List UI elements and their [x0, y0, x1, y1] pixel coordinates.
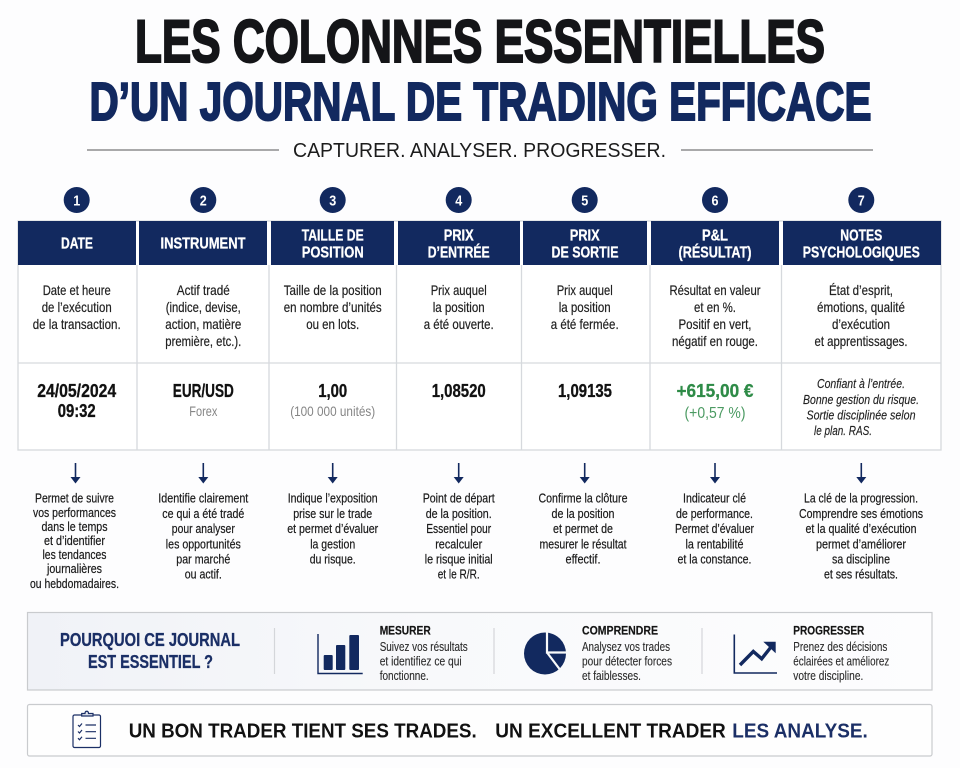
- subtitle: CAPTURER. ANALYSER. PROGRESSER.: [293, 140, 666, 162]
- header: P&L: P&L: [702, 228, 728, 244]
- benefit: prix d'entrée: Point de départ: [423, 490, 495, 506]
- description: notes psychologiques: [814, 282, 908, 349]
- benefit: notes psychologiques: Comprendre ses émotions: [799, 506, 923, 521]
- example: date: 09:32: [58, 401, 96, 421]
- benefit: prix de sortie: mesurer le résultat: [540, 536, 627, 552]
- description: prix d'entrée: la position: [433, 299, 485, 315]
- description: notes psychologiques: et apprentissages.: [814, 333, 908, 349]
- benefit: prix de sortie: et permet de: [553, 521, 613, 536]
- description: instrument: Actif tradé: [177, 282, 230, 298]
- arrow 6: [710, 463, 720, 484]
- badge 1: [64, 187, 90, 213]
- arrow 4: [454, 463, 464, 484]
- example: notes psychologiques: Bonne gestion du risque.: [803, 392, 919, 407]
- badge 5: [572, 187, 598, 213]
- description: P&L: Résultat en valeur: [670, 282, 761, 298]
- column 2: instrument: [139, 187, 267, 582]
- benefit: taille de position: la gestion: [310, 536, 355, 552]
- description: notes psychologiques: émotions, qualité: [817, 299, 905, 315]
- header: date: [18, 221, 136, 265]
- example: prix de sortie: 1,09135: [558, 381, 612, 401]
- benefit: notes psychologiques: et la qualité d’exécution: [806, 521, 916, 536]
- example: taille de position: [290, 381, 375, 419]
- header: notes psychologiques: PSYCHOLOGIQUES: [803, 244, 920, 262]
- benefit: prix d'entrée: [423, 490, 495, 582]
- description: prix d'entrée: Prix auquel: [431, 282, 487, 298]
- description: P&L: [670, 282, 761, 349]
- mesurer text: MESURER: [380, 624, 431, 638]
- comprendre text: [582, 624, 672, 683]
- description: prix de sortie: a été fermée.: [551, 316, 619, 332]
- description: taille de position: [284, 282, 382, 332]
- title: [90, 8, 872, 132]
- badge 3: 3: [329, 192, 336, 210]
- benefit: P&L: Permet d’évaluer: [675, 521, 755, 536]
- column 4: prix d'entrée: [398, 187, 520, 582]
- benefit: prix de sortie: [538, 490, 628, 566]
- header: prix de sortie: DE SORTIE: [552, 244, 619, 262]
- benefit: prix d'entrée: de la position.: [426, 506, 492, 521]
- benefit: date: Permet de suivre: [35, 490, 114, 506]
- benefit: date: journalières: [46, 561, 102, 576]
- benefit: prix de sortie: Confirme la clôture: [538, 490, 628, 506]
- mesurer text: fonctionne.: [380, 669, 429, 683]
- progresser text: votre discipline.: [793, 669, 863, 683]
- description: instrument: (indice, devise,: [166, 299, 241, 315]
- benefit: date: ou hebdomadaires.: [30, 576, 119, 591]
- benefit: instrument: ou actif.: [185, 566, 222, 582]
- badge 2: [190, 187, 216, 213]
- mesurer text: Suivez vos résultats: [380, 640, 468, 654]
- benefit: date: et d’identifier: [44, 533, 106, 548]
- benefit: notes psychologiques: La clé de la progression.: [804, 490, 918, 506]
- description: P&L: négatif en rouge.: [672, 333, 758, 349]
- description: P&L: et en %.: [694, 299, 736, 315]
- progresser text: [793, 624, 889, 683]
- description: date: de la transaction.: [33, 316, 121, 332]
- badge 2: 2: [200, 192, 207, 210]
- benefit: taille de position: prise sur le trade: [293, 506, 372, 521]
- benefit: instrument: Identifie clairement: [158, 490, 249, 506]
- benefit: date: vos performances: [33, 505, 116, 520]
- panel heading: EST ESSENTIEL ?: [88, 652, 213, 672]
- comprendre text: et faiblesses.: [582, 669, 641, 683]
- example: instrument: Forex: [189, 403, 217, 419]
- example: P&L: (+0,57 %): [684, 405, 746, 422]
- benefit: prix d'entrée: recalculer: [435, 536, 483, 552]
- description: P&L: Positif en vert,: [678, 316, 752, 332]
- example: date: 24/05/2024: [37, 381, 116, 401]
- header: taille de position: POSITION: [302, 244, 364, 262]
- header: prix d'entrée: [398, 221, 520, 265]
- description: prix d'entrée: [424, 282, 494, 332]
- header: P&L: [651, 221, 779, 265]
- description: instrument: [165, 282, 241, 349]
- example: prix d'entrée: 1,08520: [432, 381, 486, 401]
- benefit: taille de position: et permet d’évaluer: [287, 521, 379, 536]
- icon: trend arrow: [734, 634, 777, 673]
- header: P&L: (RÉSULTAT): [678, 242, 752, 262]
- benefit: notes psychologiques: et ses résultats.: [824, 566, 898, 582]
- badge 3: [320, 187, 346, 213]
- header: prix d'entrée: D’ENTRÉE: [428, 242, 490, 262]
- example: notes psychologiques: Sortie disciplinée selon: [806, 408, 916, 422]
- benefit: taille de position: du risque.: [310, 552, 356, 566]
- example: instrument: [173, 381, 234, 419]
- benefit: date: les tendances: [42, 547, 107, 562]
- benefit: P&L: la rentabilité: [686, 536, 744, 552]
- header: prix de sortie: PRIX: [570, 228, 600, 244]
- benefit: P&L: Indicateur clé: [683, 490, 746, 506]
- description: taille de position: Taille de la position: [284, 282, 382, 298]
- benefit: instrument: par marché: [176, 552, 230, 566]
- badge 7: [848, 187, 874, 213]
- benefit: notes psychologiques: sa discipline: [832, 552, 890, 566]
- panel heading: POURQUOI CE JOURNAL: [60, 630, 240, 650]
- example: instrument: EUR/USD: [173, 381, 234, 401]
- example: date: [37, 381, 116, 421]
- badge 5: 5: [581, 192, 588, 210]
- description: taille de position: ou en lots.: [306, 316, 359, 332]
- progresser text: éclairées et améliorez: [793, 654, 889, 668]
- badge 1: 1: [73, 192, 80, 210]
- panel heading: [60, 630, 240, 672]
- badge 6: [702, 187, 728, 213]
- description: prix d'entrée: a été ouverte.: [424, 316, 494, 332]
- column 5: prix de sortie: [523, 187, 647, 566]
- badge 4: [446, 187, 472, 213]
- benefit: P&L: de performance.: [676, 506, 753, 521]
- panel: conclusion: [28, 704, 932, 756]
- column 3: taille de position: [271, 187, 394, 566]
- badge 7: 7: [858, 192, 865, 210]
- icon: bar chart: [318, 634, 363, 674]
- description: prix de sortie: la position: [559, 299, 611, 315]
- header: notes psychologiques: [783, 221, 941, 265]
- column 6: P&L: [651, 187, 779, 566]
- comprendre text: pour détecter forces: [582, 654, 672, 668]
- header: prix d'entrée: PRIX: [444, 228, 474, 244]
- panel: conclusion: LES ANALYSE.: [732, 720, 868, 742]
- benefit: instrument: pour analyser: [172, 521, 235, 536]
- benefit: P&L: [675, 490, 755, 566]
- badge 6: 6: [712, 192, 718, 210]
- header: prix de sortie: [523, 221, 647, 265]
- example: P&L: [676, 380, 754, 422]
- benefit: taille de position: [287, 490, 379, 566]
- example: notes psychologiques: [803, 376, 919, 438]
- conclusion text: UN BON TRADER TIENT SES TRADES.: [129, 720, 477, 742]
- arrow 3: [328, 463, 338, 484]
- example: notes psychologiques: le plan. RAS.: [814, 423, 872, 438]
- example: taille de position: (100 000 unités): [290, 403, 375, 419]
- header: notes psychologiques: NOTES: [840, 228, 883, 244]
- benefit: date: [30, 490, 119, 591]
- example: P&L: +615,00 €: [676, 380, 754, 401]
- benefit: prix de sortie: de la position: [552, 506, 614, 521]
- comprendre text: COMPRENDRE: [582, 624, 658, 638]
- benefit: instrument: ce qui a été tradé: [162, 506, 244, 521]
- benefit: notes psychologiques: permet d’améliorer: [816, 536, 907, 552]
- description: notes psychologiques: d’exécution: [832, 316, 890, 332]
- arrow 1: [70, 463, 80, 484]
- benefit: prix d'entrée: et le R/R.: [438, 566, 480, 582]
- column 1: date: [18, 187, 136, 591]
- icon: pie chart: [524, 631, 567, 674]
- table grid: [18, 221, 941, 450]
- arrow 2: [198, 463, 208, 484]
- benefit: notes psychologiques: [799, 490, 923, 582]
- header: taille de position: TAILLE DE: [302, 228, 364, 244]
- description: taille de position: en nombre d’unités: [284, 299, 382, 315]
- description: date: de l’exécution: [42, 299, 112, 315]
- icon: clipboard: [73, 711, 100, 748]
- benefit: prix d'entrée: Essentiel pour: [426, 521, 492, 536]
- description: prix de sortie: Prix auquel: [557, 282, 613, 298]
- column 7: notes psychologiques: [783, 187, 941, 582]
- header: taille de position: [271, 221, 394, 265]
- description: instrument: première, etc.).: [165, 333, 241, 349]
- header: instrument: [139, 221, 267, 265]
- example: notes psychologiques: Confiant à l’entrée.: [817, 376, 905, 391]
- description: prix de sortie: [551, 282, 619, 332]
- header: instrument: INSTRUMENT: [160, 236, 246, 252]
- arrow 7: [856, 463, 866, 484]
- description: instrument: action, matière: [165, 316, 241, 332]
- benefit: taille de position: Indique l’exposition: [288, 490, 378, 506]
- panel: conclusion: UN EXCELLENT TRADER: [495, 720, 726, 742]
- benefit: date: dans le temps: [42, 519, 108, 534]
- description: date: [33, 282, 121, 332]
- benefit: prix d'entrée: le risque initial: [425, 552, 493, 566]
- description: date: Date et heure: [43, 282, 111, 298]
- progresser text: Prenez des décisions: [793, 640, 887, 654]
- mesurer text: et identifiez ce qui: [380, 654, 462, 668]
- header: date: DATE: [61, 236, 93, 252]
- mesurer text: [380, 624, 468, 683]
- benefit: prix de sortie: effectif.: [566, 552, 600, 566]
- panel: pourquoi ce journal est essentiel: [28, 612, 932, 690]
- badge 4: 4: [455, 192, 463, 210]
- description: notes psychologiques: État d’esprit,: [829, 282, 893, 298]
- example: taille de position: 1,00: [318, 381, 347, 401]
- comprendre text: Analysez vos trades: [582, 640, 670, 654]
- benefit: instrument: les opportunités: [166, 536, 241, 552]
- arrow 5: [580, 463, 590, 484]
- benefit: instrument: [158, 490, 249, 582]
- progresser text: PROGRESSER: [793, 624, 865, 638]
- benefit: P&L: et la constance.: [678, 552, 752, 566]
